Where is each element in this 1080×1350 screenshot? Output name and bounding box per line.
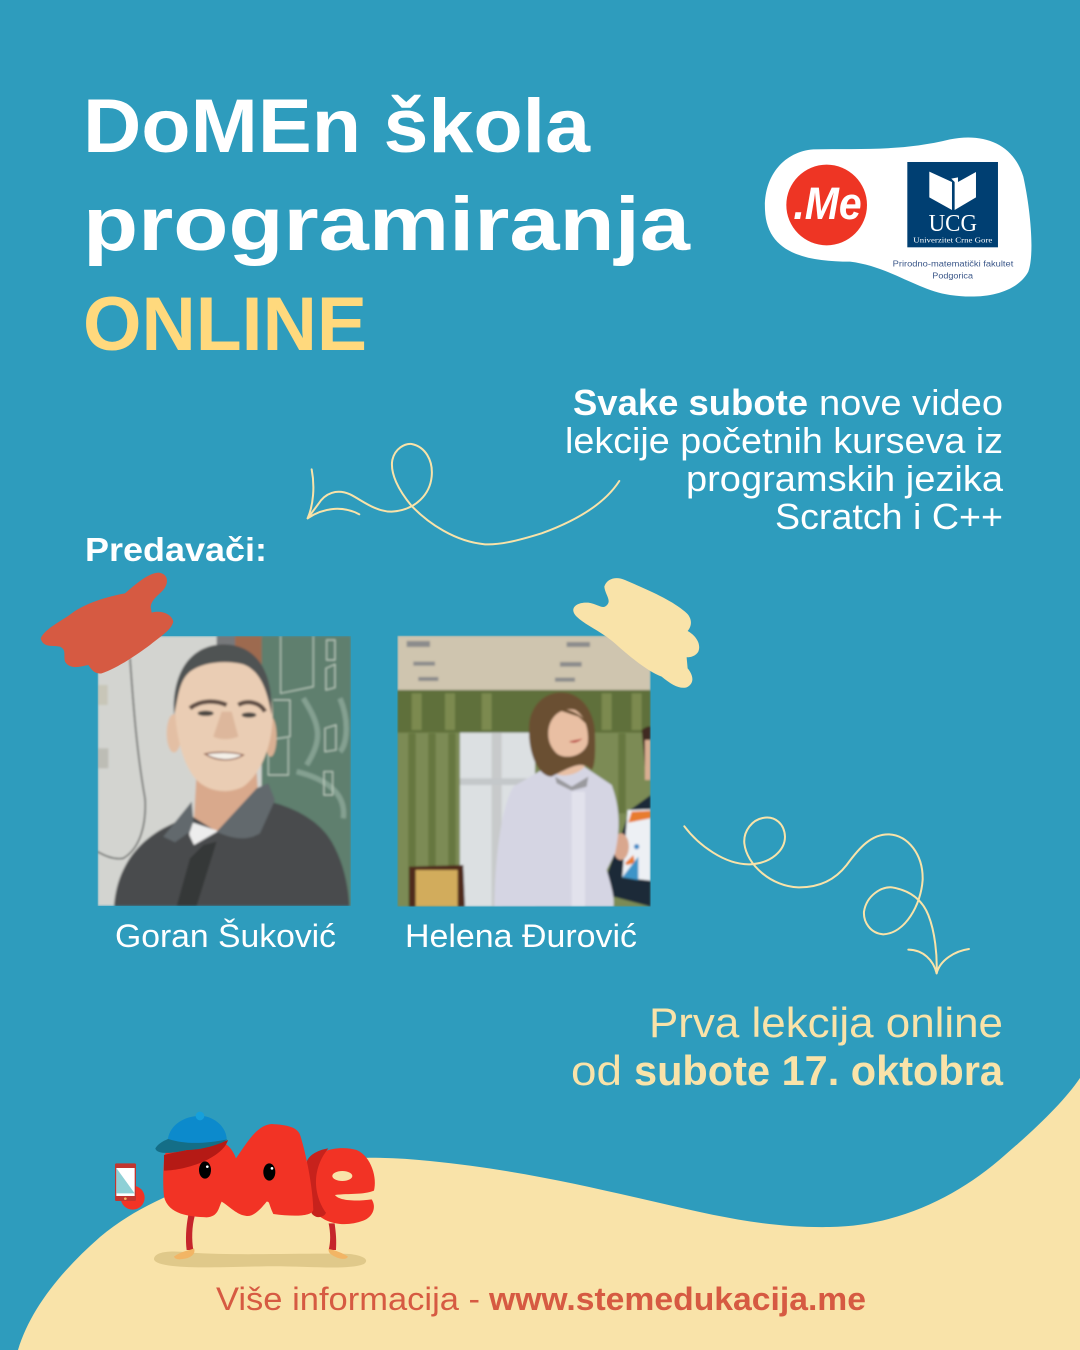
intro text (565, 382, 1004, 537)
arrow: towards first lesson (684, 818, 969, 973)
legs and shoes (174, 1215, 348, 1259)
heading: lecturers: Predavači: (85, 531, 267, 568)
icon: UCG logo: UCG (929, 211, 977, 237)
logo panel (765, 137, 1031, 297)
photo: Goran Šuković (98, 636, 351, 906)
caption: Helena Đurović: Helena Đurović (405, 918, 637, 954)
photo: Helena Đurović (397, 636, 651, 907)
intro text: programskih jezika (686, 458, 1004, 499)
hand and phone (115, 1163, 145, 1210)
first lesson text: od (571, 1047, 622, 1094)
faculty caption: Podgorica (932, 270, 973, 280)
footer text (216, 1281, 866, 1317)
icon: UCG logo (907, 162, 998, 247)
first lesson text: Prva lekcija online (649, 999, 1003, 1046)
icon: UCG logo: Univerzitet Crne Gore (913, 236, 992, 244)
faculty caption: Prirodno-matematički fakultet (893, 259, 1014, 269)
cap shadow on head (164, 1140, 228, 1171)
arrow: towards lecturers (308, 444, 619, 544)
title: DoMEn škola (83, 84, 591, 169)
footer text: Više informacija - (216, 1281, 480, 1317)
icon: .Me logo (786, 165, 867, 245)
scribble: red (41, 573, 173, 673)
first lesson text: subote 17. oktobra (634, 1047, 1004, 1094)
faculty caption (893, 259, 1014, 280)
cap (155, 1112, 227, 1153)
intro text: lekcije početnih kurseva iz (565, 420, 1003, 461)
intro text: Scratch i C++ (775, 496, 1003, 537)
title: programiranja (83, 182, 691, 267)
caption: Goran Šuković: Goran Šuković (115, 918, 336, 954)
bottom cream wave (18, 1078, 1080, 1350)
white blob (765, 137, 1031, 297)
scribble: yellow (573, 578, 699, 688)
first lesson text (571, 999, 1004, 1094)
title: ONLINE (83, 282, 367, 367)
intro text: nove video (819, 382, 1003, 423)
mascot: .Me character (115, 1112, 375, 1267)
icon: .Me logo: .Me (793, 178, 862, 229)
eyes (199, 1161, 275, 1181)
letter M (163, 1124, 313, 1217)
letter e (307, 1148, 375, 1224)
footer text: www.stemedukacija.me (488, 1281, 866, 1317)
title (83, 84, 691, 367)
ground shadow (154, 1251, 366, 1267)
intro text: Svake subote (573, 382, 808, 423)
